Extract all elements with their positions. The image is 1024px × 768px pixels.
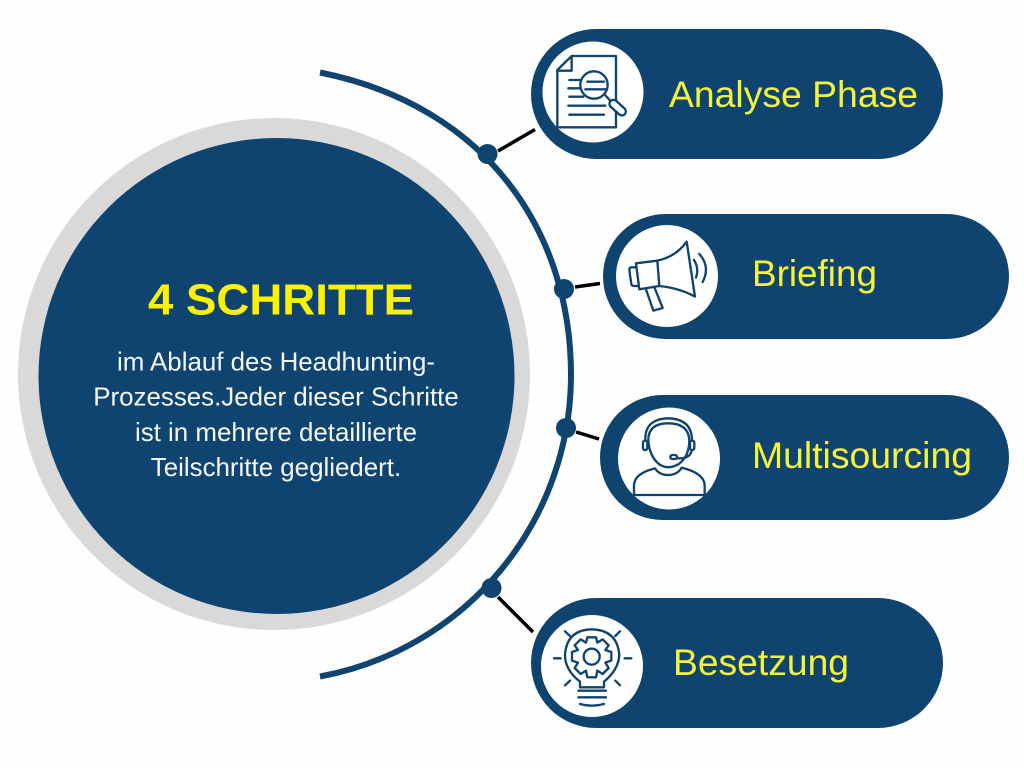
icon: person with headset: [634, 418, 705, 495]
icon: megaphone: [629, 242, 706, 311]
central circle panel: [18, 118, 530, 630]
panel: Analyse Phase: [531, 29, 943, 159]
icon: document with magnifier: [557, 56, 628, 127]
heading: 4 SCHRITTE: [148, 276, 414, 324]
outer arc: [320, 72, 571, 676]
connector 4: [482, 578, 533, 632]
panel: Multisourcing: [600, 395, 1009, 520]
label: Multisourcing: [752, 435, 972, 476]
label: Besetzung: [673, 642, 849, 683]
connector 3: [556, 418, 599, 439]
connector 2: [554, 279, 600, 299]
label: Briefing: [752, 253, 877, 294]
label: Analyse Phase: [669, 74, 918, 115]
description text: ist in mehrere detaillierte: [135, 419, 417, 447]
description text: im Ablauf des Headhunting-: [117, 348, 435, 376]
description text: [93, 348, 459, 482]
panel: Briefing: [603, 214, 1009, 339]
panel: Besetzung: [531, 598, 943, 728]
icon: lightbulb with gear: [554, 629, 631, 706]
navy disc: [38, 138, 514, 614]
description text: Teilschritte gegliedert.: [151, 454, 401, 482]
connector 1: [478, 130, 535, 164]
description text: Prozesses.Jeder dieser Schritte: [93, 384, 459, 412]
grey ring: [18, 118, 530, 630]
